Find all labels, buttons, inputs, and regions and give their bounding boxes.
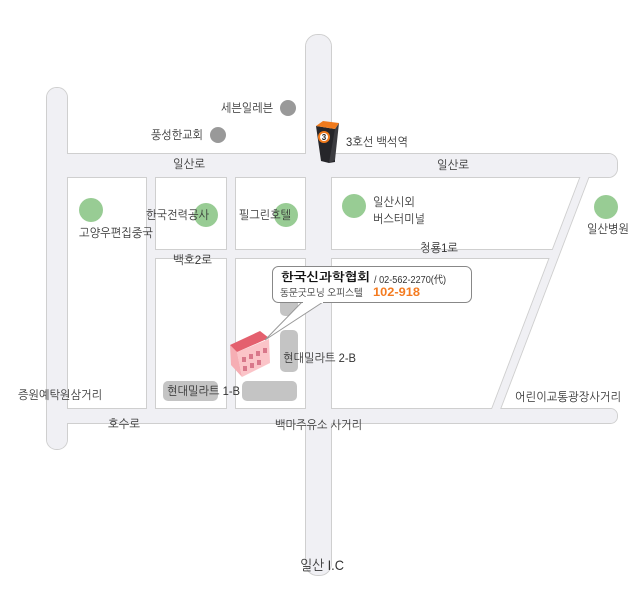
- landmark dots: green: [79, 194, 618, 227]
- landmark: apartment blocks: [163, 296, 298, 401]
- labels: map place names: 일산로: [437, 158, 469, 172]
- icon: subway station: 3: [322, 133, 327, 142]
- labels: map place names: 일산병원: [587, 222, 629, 236]
- landmark dots: gray: [210, 100, 296, 143]
- labels: map place names: 백호2로: [173, 253, 212, 267]
- labels: map place names: 필그린호텔: [239, 208, 291, 222]
- labels: map place names: 3호선 백석역: [346, 135, 408, 149]
- callout: address: 102-918: [373, 285, 420, 299]
- labels: map place names: 일산시외: [373, 195, 415, 209]
- callout: address: 동문굿모닝 오피스텔: [280, 287, 363, 299]
- labels: map place names: 버스터미널: [373, 212, 425, 226]
- labels: map place names: 청룡1로: [420, 241, 458, 255]
- labels: map place names: 현대밀라트 1-B: [167, 384, 240, 398]
- callout: address: 한국신과학협회: [281, 270, 370, 284]
- labels: map place names: 일산 I.C: [300, 557, 344, 573]
- labels: map place names: 세븐일레븐: [221, 101, 273, 115]
- labels: map place names: 현대밀라트 2-B: [283, 351, 356, 365]
- icon: building: [230, 331, 270, 377]
- callout: address: [265, 266, 472, 340]
- labels: map place names: 호수로: [108, 417, 140, 431]
- labels: map place names: 백마주유소 사거리: [275, 418, 362, 432]
- labels: map place names: 일산로: [173, 157, 205, 171]
- labels: map place names: 고양우편집중국: [79, 226, 153, 240]
- labels: map place names: 증원예탁원삼거리: [18, 388, 102, 402]
- callout: address: / 02-562-2270(代): [374, 274, 446, 286]
- labels: map place names: [18, 101, 629, 573]
- icon: subway station: [316, 121, 339, 163]
- labels: map place names: 어린이교통광장사거리: [515, 390, 621, 404]
- labels: map place names: 풍성한교회: [151, 128, 203, 142]
- labels: map place names: 한국전력공사: [146, 208, 209, 222]
